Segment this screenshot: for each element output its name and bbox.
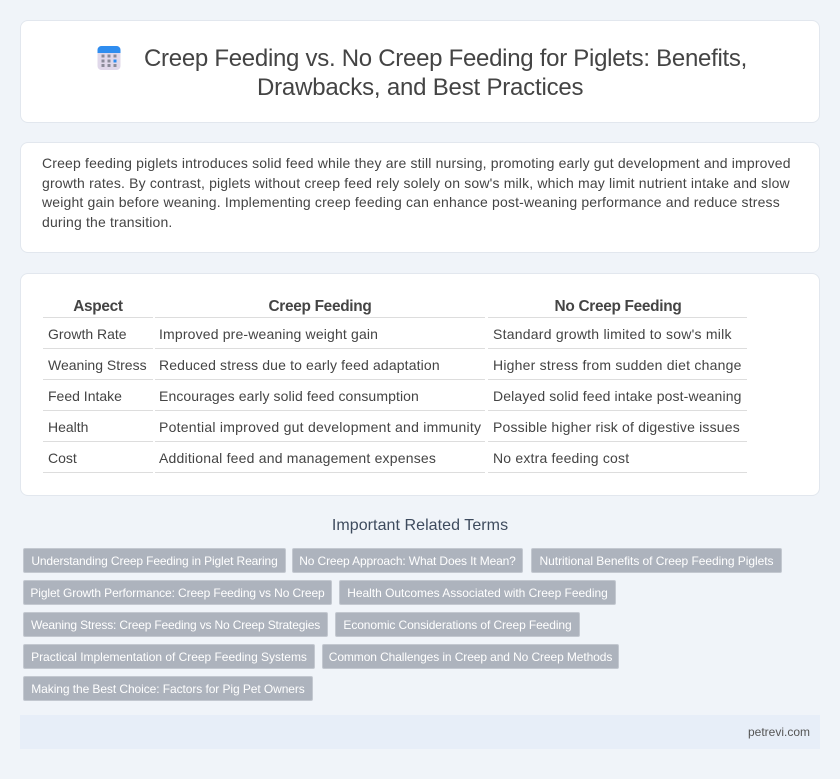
table header row: Creep Feeding [268, 298, 372, 315]
table header row: Aspect [73, 298, 123, 315]
introduction text: during the transition. [42, 214, 172, 230]
table header row [73, 298, 681, 315]
icon: calendar [98, 46, 120, 70]
tag: No Creep Approach: What Does It Mean? [299, 554, 516, 568]
row: cost: No extra feeding cost [493, 450, 629, 466]
tag [322, 644, 619, 669]
tag: Common Challenges in Creep and No Creep Methods [329, 650, 612, 664]
row: feed intake: Encourages early solid feed consumption [159, 388, 419, 404]
row: health: Health [48, 419, 88, 435]
introduction text: growth rates. By contrast, piglets without creep feed rely solely on sow's milk, which may limit nutrient intake and slow [42, 175, 790, 191]
tag: Weaning Stress: Creep Feeding vs No Creep Strategies [31, 618, 320, 632]
row: cost [48, 450, 630, 466]
row: feed intake: Delayed solid feed intake post-weaning [493, 388, 742, 404]
tag [335, 612, 580, 637]
row: cost: Cost [48, 450, 77, 466]
tag [339, 580, 616, 605]
tag: Economic Considerations of Creep Feeding [343, 618, 572, 632]
tag: Piglet Growth Performance: Creep Feeding vs No Creep [30, 586, 325, 600]
footer bar [20, 715, 820, 749]
row: health: Possible higher risk of digestive issues [493, 419, 740, 435]
tag [292, 548, 523, 573]
tag [531, 548, 782, 573]
panel: comparison table [20, 273, 820, 496]
row: cost: Additional feed and management expenses [159, 450, 436, 466]
title: Drawbacks, and Best Practices [257, 74, 583, 101]
tag: Understanding Creep Feeding in Piglet Rearing [31, 554, 278, 568]
introduction text [42, 155, 791, 230]
row: feed intake: Feed Intake [48, 388, 122, 404]
tag [23, 644, 315, 669]
row: weaning stress: Weaning Stress [48, 357, 147, 373]
row: weaning stress [48, 357, 742, 373]
comparison table [43, 298, 747, 473]
footer credit: petrevi.com [748, 725, 810, 739]
tag [23, 548, 286, 573]
introduction text: weight gain before weaning. Implementing creep feeding can enhance post-weaning performance and reduce stress [42, 194, 780, 210]
introduction text: Creep feeding piglets introduces solid feed while they are still nursing, promoting early gut development and improved [42, 155, 791, 171]
row: growth rate: Growth Rate [48, 326, 127, 342]
heading: important related terms: Important Related Terms [332, 517, 508, 534]
row: health: Potential improved gut development and immunity [159, 419, 481, 435]
panel: title header [20, 20, 820, 123]
tag [23, 612, 328, 637]
row: weaning stress: Reduced stress due to early feed adaptation [159, 357, 440, 373]
row: weaning stress: Higher stress from sudden diet change [493, 357, 742, 373]
tag [23, 580, 332, 605]
related term tags [23, 548, 782, 701]
table header row: No Creep Feeding [555, 298, 681, 315]
row: growth rate: Improved pre-weaning weight gain [159, 326, 378, 342]
tag [23, 676, 313, 701]
tag: Practical Implementation of Creep Feeding Systems [31, 650, 307, 664]
title [144, 45, 747, 101]
row: health [48, 419, 740, 435]
row: growth rate: Standard growth limited to sow's milk [493, 326, 732, 342]
row: feed intake [48, 388, 742, 404]
panel: introduction [20, 142, 820, 253]
tag: Making the Best Choice: Factors for Pig Pet Owners [31, 682, 305, 696]
title: Creep Feeding vs. No Creep Feeding for Piglets: Benefits, [144, 45, 747, 72]
tag: Health Outcomes Associated with Creep Feeding [347, 586, 608, 600]
row: growth rate [48, 326, 732, 342]
tag: Nutritional Benefits of Creep Feeding Piglets [540, 554, 773, 568]
